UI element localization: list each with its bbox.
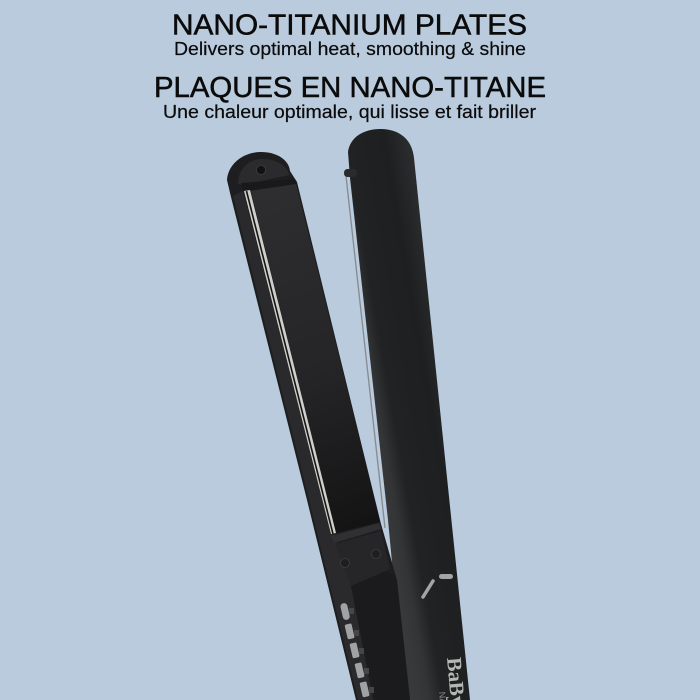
nano-titanium plate (251, 184, 380, 533)
lower plate section (335, 531, 390, 586)
French subtitle: Une chaleur optimale, qui lisse et fait briller (163, 102, 536, 122)
arm body (227, 152, 410, 700)
hinge pin (344, 169, 357, 177)
grip panel (351, 572, 410, 700)
plate retaining ridge (241, 179, 297, 191)
plate polished edge (244, 190, 336, 534)
arm lighter left bevel (233, 191, 373, 700)
end cap inner (238, 159, 289, 185)
English title: NANO-TITANIUM PLATES (172, 10, 527, 42)
hair straightener (227, 129, 473, 700)
upper arm: back of iron (344, 129, 473, 700)
plate base ridge (331, 523, 381, 543)
control buttons (340, 602, 370, 697)
screw right (372, 550, 380, 558)
heading block (154, 10, 546, 122)
temperature mark: horizontal dash (439, 574, 453, 579)
screw left (340, 558, 350, 568)
button labels (349, 608, 374, 693)
arm body (348, 129, 470, 700)
lower arm: plate side (227, 152, 410, 700)
wire between arms (346, 176, 385, 528)
screw on cap (256, 166, 266, 174)
French title: PLAQUES EN NANO-TITANE (154, 72, 546, 104)
temperature mark: diagonal dash (423, 581, 433, 597)
English subtitle: Delivers optimal heat, smoothing & shine (174, 39, 526, 59)
